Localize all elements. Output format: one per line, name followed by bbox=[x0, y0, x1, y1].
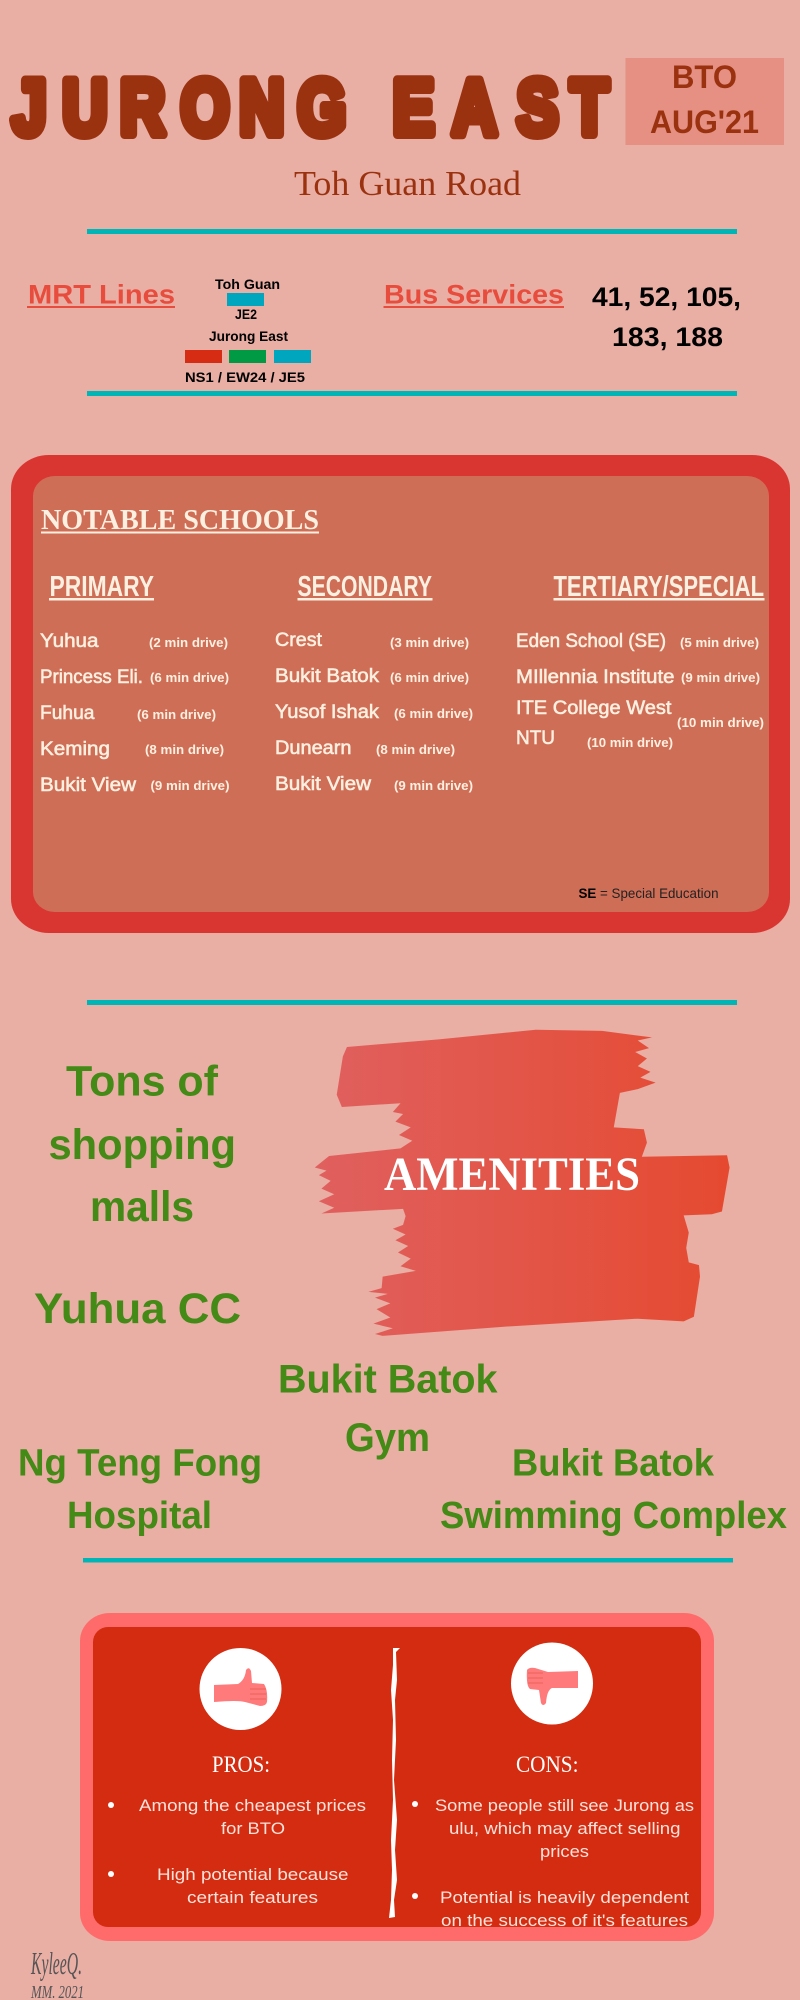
heading: amenities: AMENITIES bbox=[384, 1148, 640, 1201]
column: pros: High potential because bbox=[157, 1865, 348, 1884]
amenity: Bukit Batok Gym: Gym bbox=[345, 1416, 430, 1460]
icon: JE line colour bbox=[227, 293, 264, 306]
column: primary: Princess Eli. bbox=[40, 667, 143, 688]
column: cons: CONS: bbox=[516, 1752, 578, 1777]
column: tertiary and special: MIllennia Institute bbox=[516, 667, 674, 688]
column: secondary: Bukit Batok bbox=[275, 666, 380, 687]
column: pros: PROS: bbox=[212, 1752, 270, 1777]
column: pros: for BTO bbox=[221, 1819, 285, 1838]
badge: BTO Aug'21: BTO bbox=[672, 59, 737, 95]
bus service numbers: 41, 52, 105, bbox=[592, 282, 741, 312]
icon: EW line colour bbox=[229, 350, 266, 363]
column: primary: (6 min drive) bbox=[137, 708, 216, 722]
amenities brush banner bbox=[315, 1030, 730, 1336]
column: primary: (6 min drive) bbox=[150, 671, 229, 685]
column: pros bbox=[108, 1752, 366, 1907]
amenity: Bukit Batok Gym: Bukit Batok bbox=[278, 1358, 498, 1402]
amenity: Bukit Batok Swimming Complex: Bukit Batok bbox=[512, 1442, 715, 1484]
heading: MRT Lines: MRT Lines bbox=[28, 280, 175, 310]
amenity: Ng Teng Fong Hospital: Ng Teng Fong bbox=[18, 1442, 262, 1484]
amenity: Bukit Batok Swimming Complex bbox=[440, 1442, 787, 1537]
MRT line legend: JE2 bbox=[235, 306, 257, 322]
signature bbox=[30, 1945, 84, 2000]
badge: BTO Aug'21 bbox=[626, 58, 784, 145]
heading: Bus Services: Bus Services bbox=[384, 280, 564, 310]
amenity: shopping malls: shopping bbox=[48, 1121, 236, 1169]
column: cons: Potential is heavily dependent bbox=[440, 1888, 689, 1907]
subtitle: Toh Guan Road bbox=[294, 164, 521, 203]
amenity: Ng Teng Fong Hospital: Hospital bbox=[67, 1495, 212, 1537]
footnote: SE: SE = Special Education bbox=[578, 885, 718, 901]
amenity: shopping malls: malls bbox=[90, 1183, 194, 1231]
MRT line legend bbox=[185, 276, 311, 385]
MRT line legend: Toh Guan bbox=[215, 276, 280, 292]
brush stroke bbox=[315, 1030, 730, 1336]
bus service numbers bbox=[592, 282, 741, 352]
column: secondary: (6 min drive) bbox=[390, 671, 469, 685]
amenity: Ng Teng Fong Hospital bbox=[18, 1442, 262, 1537]
column: secondary bbox=[275, 571, 473, 795]
column: secondary: Dunearn bbox=[275, 738, 352, 759]
column: secondary: (6 min drive) bbox=[394, 707, 473, 721]
column: cons bbox=[412, 1752, 694, 1930]
column: secondary: (9 min drive) bbox=[394, 779, 473, 793]
column: cons: on the success of it's features bbox=[441, 1911, 688, 1930]
panel: pros and cons bbox=[80, 1613, 714, 1941]
column: cons: Some people still see Jurong as bbox=[435, 1796, 694, 1815]
signature: KyleeQ. bbox=[31, 1945, 82, 1981]
column: tertiary and special: (10 min drive) bbox=[587, 736, 673, 750]
column: pros: Among the cheapest prices bbox=[139, 1796, 366, 1815]
column: secondary: (3 min drive) bbox=[390, 636, 469, 650]
column: primary: Bukit View bbox=[40, 775, 136, 796]
amenity: Bukit Batok Swimming Complex: Swimming Complex bbox=[440, 1495, 787, 1537]
column: cons: ulu, which may affect selling bbox=[449, 1819, 680, 1838]
column: secondary: Yusof Ishak bbox=[275, 702, 380, 723]
amenity: shopping malls: Tons of bbox=[66, 1058, 219, 1106]
column: primary: (8 min drive) bbox=[145, 743, 224, 757]
column: primary: Keming bbox=[40, 739, 110, 760]
MRT line legend: NS1 / EW24 / JE5 bbox=[185, 369, 305, 385]
column: tertiary and special: ITE College West bbox=[516, 698, 672, 719]
column: pros: certain features bbox=[187, 1888, 318, 1907]
column: tertiary and special: (5 min drive) bbox=[680, 636, 759, 650]
MRT line legend: Jurong East bbox=[209, 328, 288, 344]
title: JURONG EAST bbox=[12, 63, 609, 151]
icon: JE line colour, Jurong East bbox=[274, 350, 311, 363]
icon: thumbs up bbox=[200, 1648, 282, 1730]
column: tertiary and special: (10 min drive) bbox=[677, 716, 764, 730]
divider: torn white line bbox=[389, 1648, 400, 1918]
column: secondary: SECONDARY bbox=[298, 571, 432, 603]
column: tertiary and special: Eden School (SE) bbox=[516, 631, 666, 652]
amenity: Yuhua CC: Yuhua CC bbox=[34, 1285, 241, 1333]
icon: thumbs down bbox=[511, 1642, 593, 1724]
column: primary: Fuhua bbox=[40, 703, 95, 724]
column: primary: (2 min drive) bbox=[149, 636, 228, 650]
column: cons: prices bbox=[540, 1842, 589, 1861]
column: secondary: Bukit View bbox=[275, 774, 371, 795]
column: tertiary and special bbox=[516, 571, 764, 750]
column: primary: PRIMARY bbox=[50, 571, 154, 603]
icon: NS line colour bbox=[185, 350, 222, 363]
column: primary: Yuhua bbox=[40, 631, 99, 652]
amenity: shopping malls bbox=[48, 1058, 236, 1231]
heading: notable schools: NOTABLE SCHOOLS bbox=[41, 504, 319, 536]
column: primary bbox=[40, 571, 230, 796]
column: tertiary and special: NTU bbox=[516, 728, 555, 749]
column: tertiary and special: (9 min drive) bbox=[681, 671, 760, 685]
panel: notable schools bbox=[11, 455, 790, 933]
column: secondary: (8 min drive) bbox=[376, 743, 455, 757]
bus service numbers: 183, 188 bbox=[612, 322, 723, 352]
column: primary: (9 min drive) bbox=[150, 779, 230, 793]
badge: BTO Aug'21: AUG'21 bbox=[650, 104, 759, 140]
column: secondary: Crest bbox=[275, 630, 323, 651]
amenity: Bukit Batok Gym bbox=[278, 1358, 498, 1460]
